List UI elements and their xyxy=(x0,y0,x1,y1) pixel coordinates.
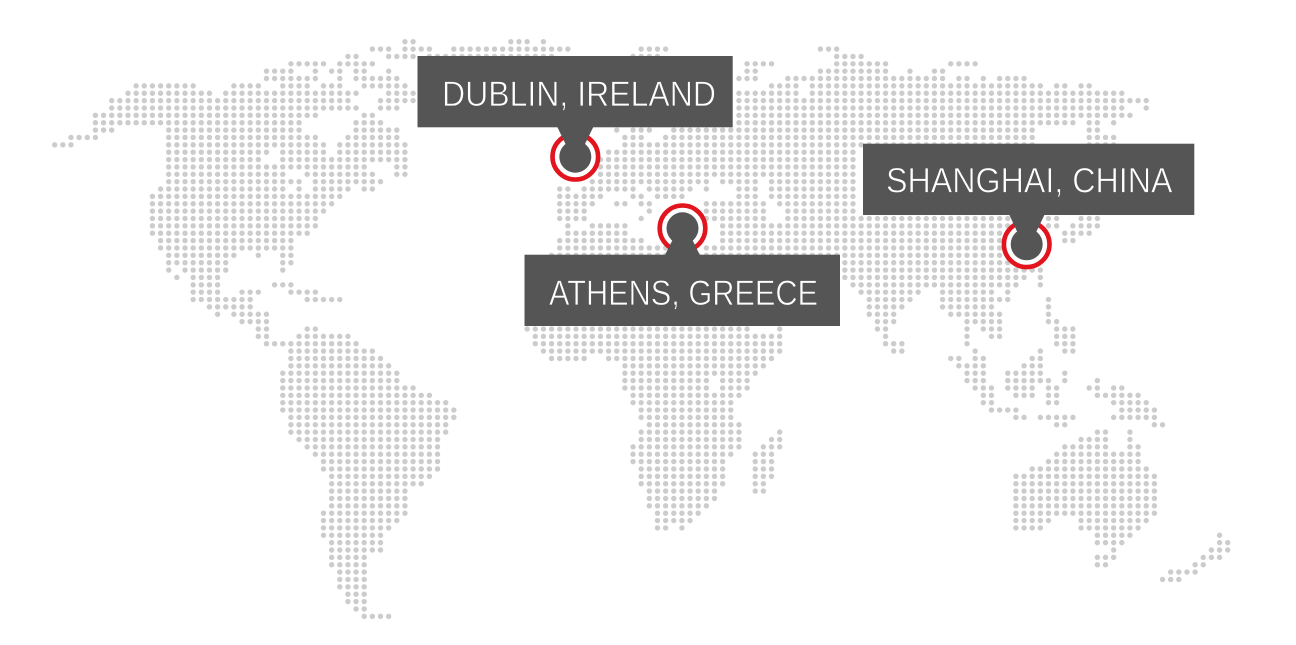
label box: Dublin xyxy=(418,56,733,127)
label pointer: Athens xyxy=(665,238,700,255)
location dot: Athens xyxy=(666,212,698,244)
pin: Shanghai, China xyxy=(863,144,1194,267)
label text: Shanghai: SHANGHAI, CHINA xyxy=(886,162,1173,201)
label text: Athens: ATHENS, GREECE xyxy=(549,274,818,313)
location dot: Shanghai xyxy=(1011,228,1043,260)
location ring: Athens xyxy=(660,206,705,251)
location ring: Shanghai xyxy=(1004,222,1050,267)
pin: Athens, Greece xyxy=(524,206,840,326)
label pointer: Shanghai xyxy=(1009,215,1044,232)
label pointer: Dublin xyxy=(557,127,593,145)
label box: Shanghai xyxy=(863,144,1194,215)
label box: Athens xyxy=(524,255,840,326)
location ring: Dublin xyxy=(552,134,598,180)
pin: Dublin, Ireland xyxy=(418,56,733,180)
label text: Dublin: DUBLIN, IRELAND xyxy=(442,75,716,114)
location dot: Dublin xyxy=(559,141,591,173)
